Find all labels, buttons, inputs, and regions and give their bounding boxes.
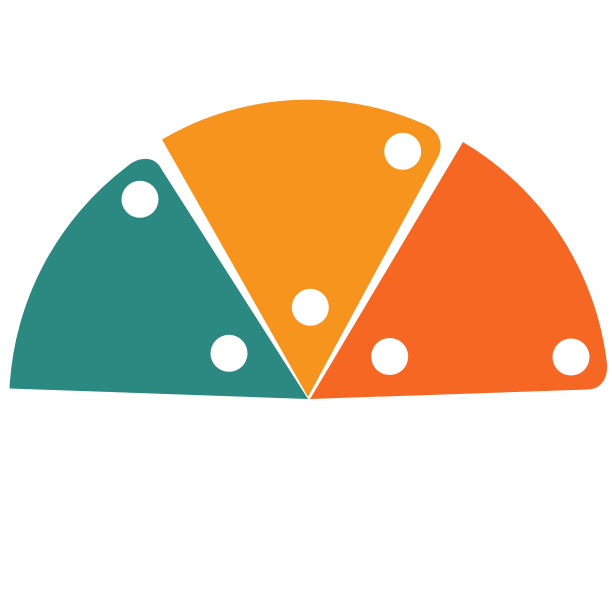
panel: orange-yellow segment: [162, 100, 441, 397]
panel: red-orange segment: [310, 142, 607, 399]
panel: teal segment: [10, 159, 308, 399]
